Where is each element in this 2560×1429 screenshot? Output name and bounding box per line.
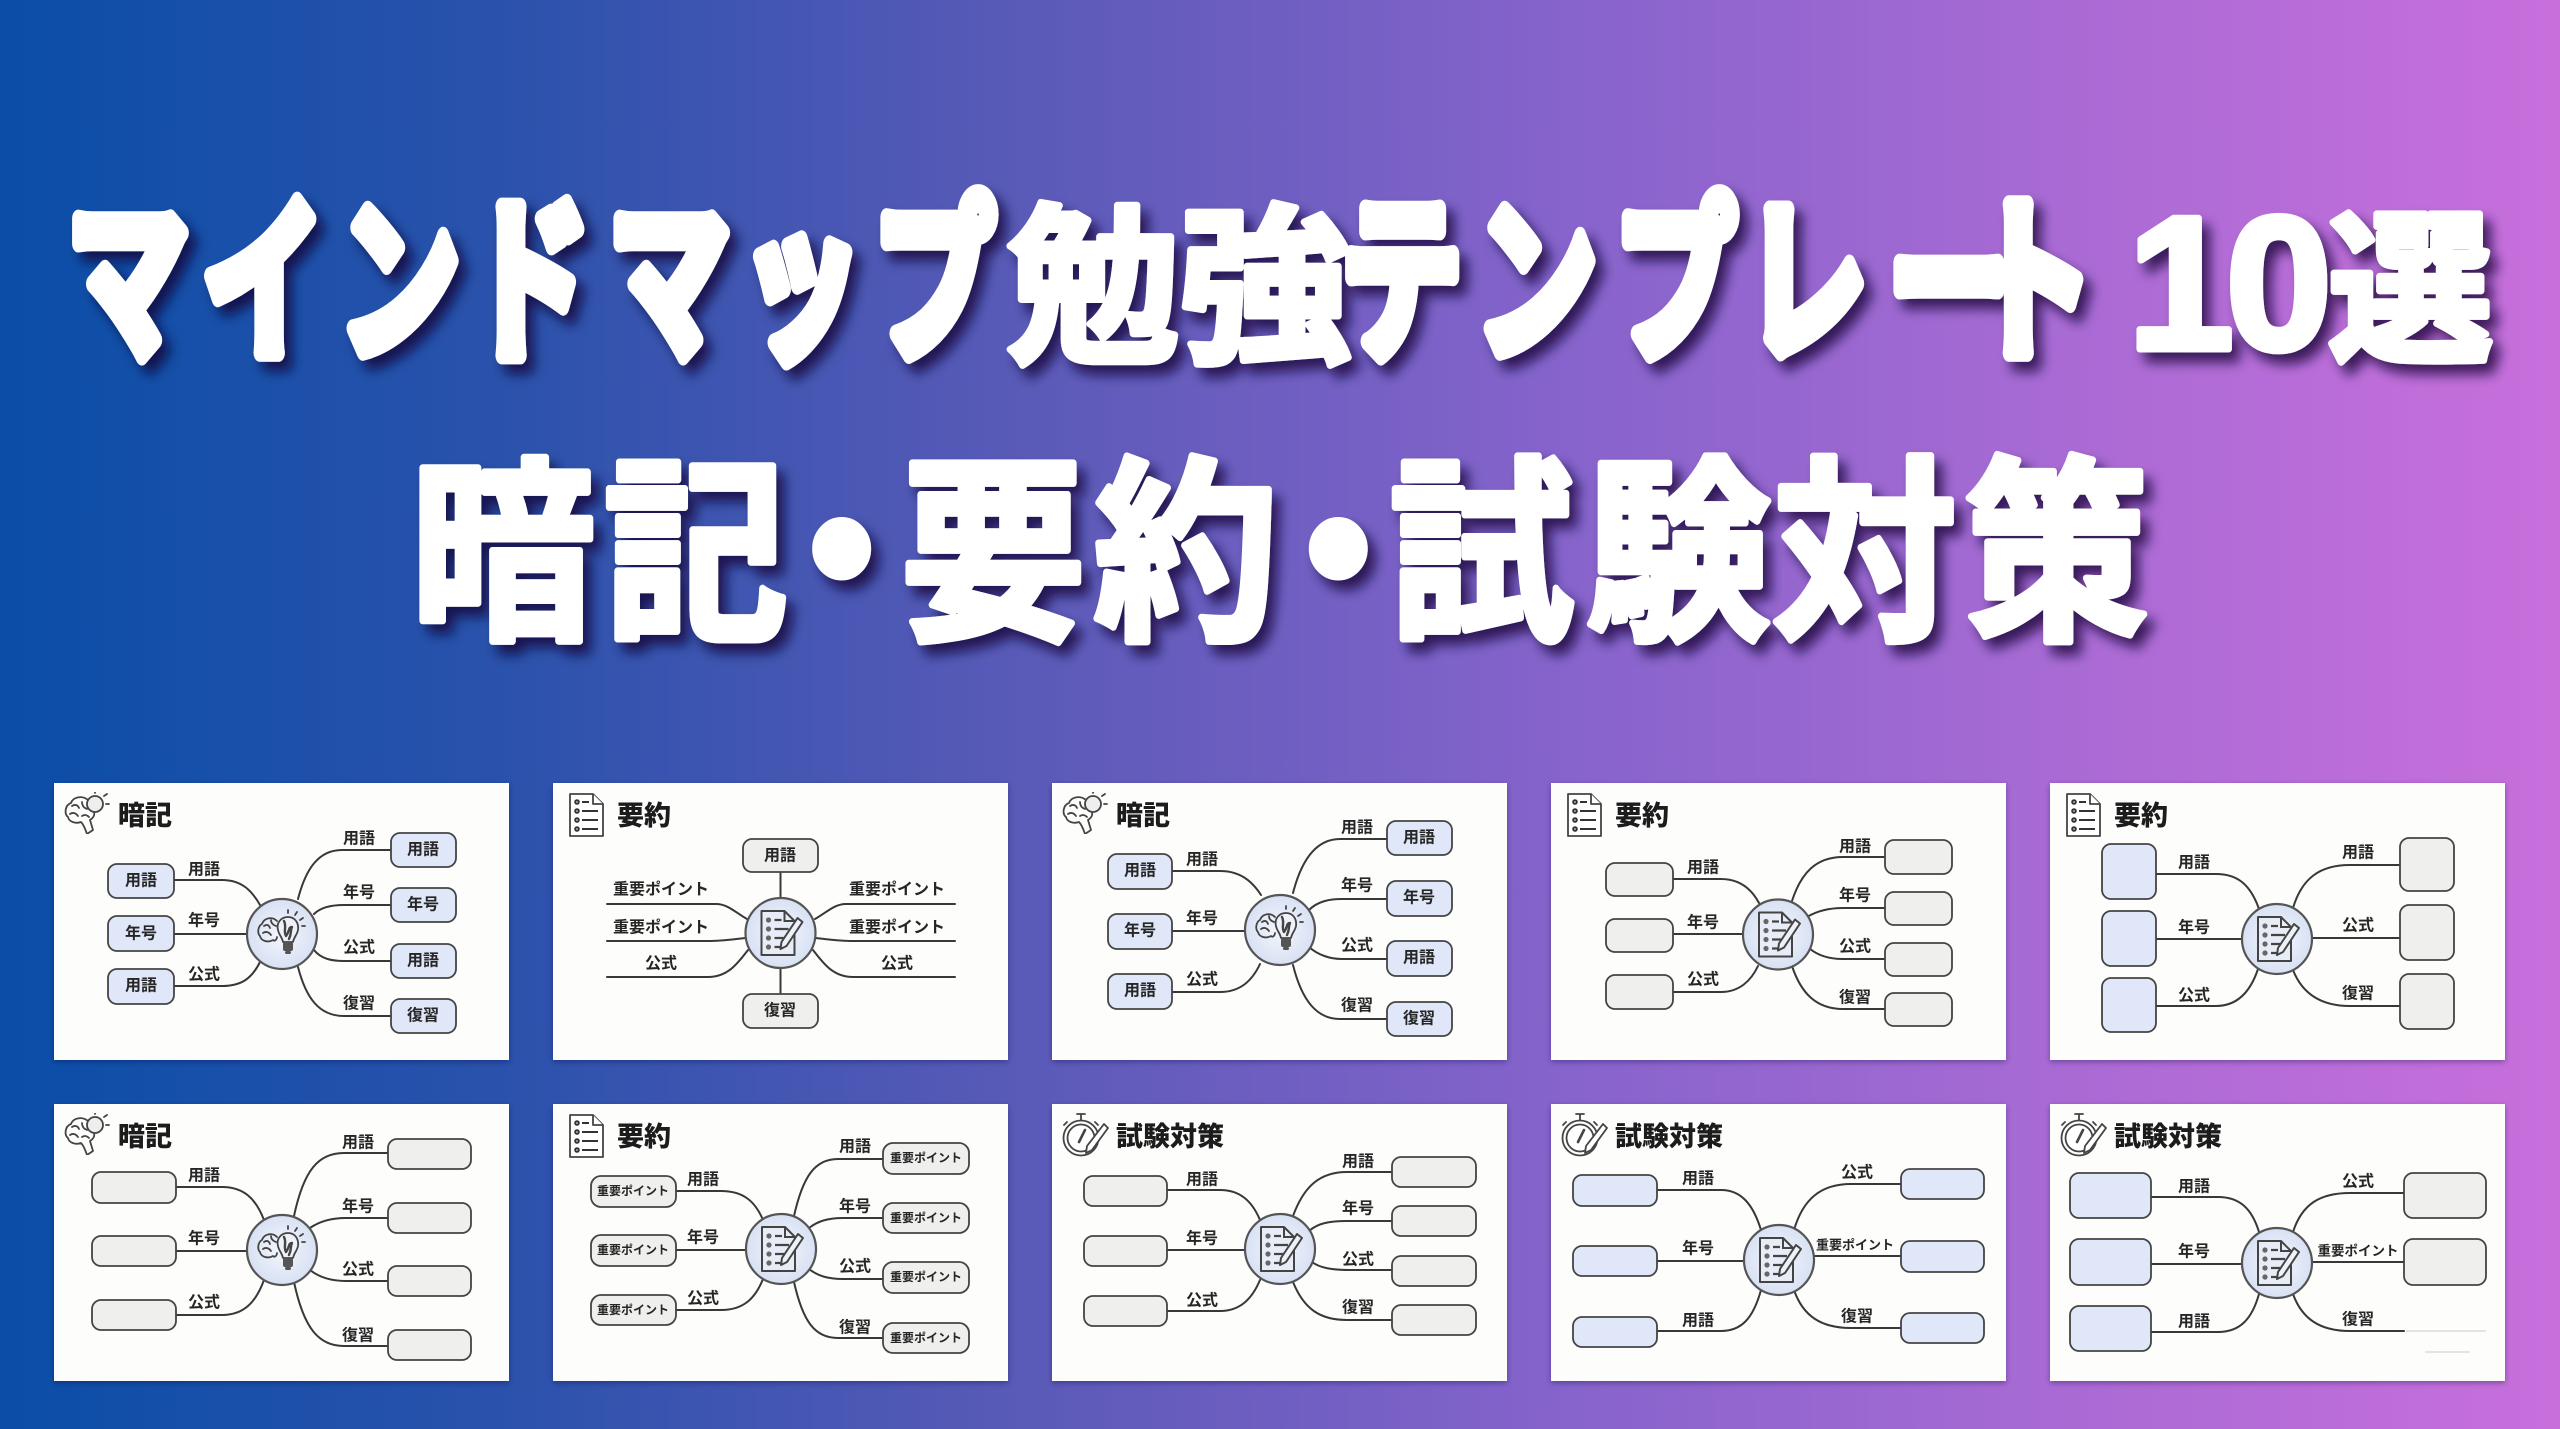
branches left: 用語 xyxy=(1186,850,1218,868)
icon: brain and bulb xyxy=(66,791,109,834)
template card 9: 試験対策 xyxy=(1551,1104,2006,1381)
center node xyxy=(2242,1228,2312,1298)
branches: 用語 xyxy=(764,846,796,864)
branches right: 復習 xyxy=(407,1006,439,1024)
branches right xyxy=(1293,818,1452,1036)
branches right: 用語 xyxy=(1342,1152,1374,1170)
branches left: 用語 xyxy=(1124,982,1156,1000)
branches: 重要ポイント xyxy=(613,880,709,898)
branches left xyxy=(2102,844,2259,1032)
branches left: 年号 xyxy=(1186,908,1218,928)
branches right: 用語 xyxy=(407,952,439,970)
branches right: 用語 xyxy=(2342,844,2374,862)
heading: 暗記 xyxy=(118,1122,172,1152)
branches: 公式 xyxy=(645,954,677,972)
card background xyxy=(553,1104,1008,1381)
branches right xyxy=(298,830,456,1033)
branches right: 復習 xyxy=(2342,1310,2374,1328)
center node xyxy=(2242,904,2312,974)
heading: 試験対策 xyxy=(1615,1121,1723,1152)
heading: 試験対策 xyxy=(2114,1121,2222,1152)
center node xyxy=(247,1215,317,1285)
template card 2: 要約 xyxy=(553,783,1008,1060)
center node xyxy=(1245,1214,1315,1284)
branches left: 年号 xyxy=(188,910,220,930)
branches left: 公式 xyxy=(687,1290,719,1308)
title line 2: 要約 xyxy=(901,445,1278,666)
branches right: 重要ポイント xyxy=(890,1330,962,1345)
branches left xyxy=(1084,1170,1260,1326)
branches left: 用語 xyxy=(1124,862,1156,880)
branches right: 重要ポイント xyxy=(890,1269,962,1284)
branches right: 年号 xyxy=(343,882,375,902)
branches right: 年号 xyxy=(1342,1198,1374,1218)
branches right: 公式 xyxy=(1341,936,1373,954)
branches right: 復習 xyxy=(1342,1298,1374,1316)
branches right: 公式 xyxy=(1839,938,1871,956)
card background xyxy=(1551,1104,2006,1381)
icon: document xyxy=(570,1115,603,1157)
branches right: 公式 xyxy=(2342,1172,2374,1190)
branches left: 重要ポイント xyxy=(597,1242,669,1257)
branches left: 年号 xyxy=(1186,1228,1218,1248)
branches right: 年号 xyxy=(1839,886,1871,904)
title line 1: テンプレート xyxy=(1341,185,2093,384)
branches left: 用語 xyxy=(1682,1170,1714,1188)
title line 2: ・ xyxy=(1246,445,1430,666)
branches right: 重要ポイント xyxy=(890,1150,962,1165)
heading: 要約 xyxy=(617,801,671,831)
branches left: 用語 xyxy=(125,872,157,890)
branches right: 年号 xyxy=(407,894,439,914)
template card 1: 暗記 xyxy=(54,783,509,1060)
icon: brain and bulb xyxy=(1064,791,1107,834)
branches left: 用語 xyxy=(2178,854,2210,872)
branches right xyxy=(2293,838,2454,1029)
branches right: 用語 xyxy=(342,1134,374,1152)
branches right: 復習 xyxy=(2342,984,2374,1002)
branches right: 年号 xyxy=(1403,888,1435,906)
branches right: 用語 xyxy=(407,840,439,858)
branches right: 公式 xyxy=(1841,1164,1873,1182)
branches right xyxy=(1794,1164,1984,1343)
title line 2: 試験対策 xyxy=(1389,445,2148,666)
card background xyxy=(2050,1104,2505,1381)
branches right: 公式 xyxy=(1342,1250,1374,1268)
branches right: 重要ポイント xyxy=(2318,1244,2398,1258)
icon: document xyxy=(2067,794,2100,836)
branches right: 復習 xyxy=(839,1318,871,1336)
branches left: 公式 xyxy=(188,966,220,984)
branches left xyxy=(1108,850,1261,1009)
branches right xyxy=(1792,838,1952,1026)
branches left xyxy=(1573,1170,1761,1347)
branches left xyxy=(108,860,260,1004)
icon: document xyxy=(570,794,603,836)
title line 2: ・ xyxy=(750,445,934,666)
branches right: 復習 xyxy=(1341,996,1373,1014)
card background xyxy=(1052,1104,1507,1381)
card background xyxy=(553,783,1008,1060)
title line 1: マインドマップ xyxy=(67,185,995,384)
branches left: 公式 xyxy=(2178,986,2210,1004)
branches left: 用語 xyxy=(1682,1312,1714,1330)
template card 6: 暗記 xyxy=(54,1104,509,1381)
branches right xyxy=(294,1134,471,1360)
card background xyxy=(54,783,509,1060)
template card 3: 暗記 xyxy=(1052,783,1507,1060)
branches left: 用語 xyxy=(1186,1170,1218,1188)
branches left: 公式 xyxy=(1687,970,1719,988)
branches left xyxy=(92,1166,264,1330)
branches left: 用語 xyxy=(687,1170,719,1188)
branches: 公式 xyxy=(881,954,913,972)
icon: stopwatch xyxy=(2062,1114,2106,1156)
branches right: 復習 xyxy=(342,1326,374,1344)
branches left: 年号 xyxy=(2178,1242,2210,1260)
branches right: 復習 xyxy=(343,994,375,1012)
branches left: 重要ポイント xyxy=(597,1302,669,1317)
branches right: 重要ポイント xyxy=(1816,1238,1894,1252)
branches left: 年号 xyxy=(1124,920,1156,940)
center node xyxy=(1743,900,1813,970)
branches right: 年号 xyxy=(839,1196,871,1216)
branches right xyxy=(1293,1152,1476,1335)
template card 5: 要約 xyxy=(2050,783,2505,1060)
template card 10: 試験対策 xyxy=(2050,1104,2505,1381)
branches left: 年号 xyxy=(125,924,157,942)
icon: stopwatch xyxy=(1064,1114,1108,1156)
branches: 重要ポイント xyxy=(849,918,945,936)
heading: 暗記 xyxy=(118,801,172,831)
card background xyxy=(1551,783,2006,1060)
branches right: 用語 xyxy=(1403,948,1435,966)
title line 2: 暗記 xyxy=(411,445,788,666)
branches left xyxy=(591,1170,763,1325)
branches right: 用語 xyxy=(1403,828,1435,846)
heading: 要約 xyxy=(1615,801,1669,831)
branches right: 用語 xyxy=(343,830,375,848)
title line 1: 選 xyxy=(2328,200,2493,384)
branches left: 年号 xyxy=(687,1228,719,1246)
branches right: 公式 xyxy=(342,1260,374,1278)
branches left: 年号 xyxy=(1682,1238,1714,1258)
branches right: 公式 xyxy=(343,938,375,956)
branches left: 公式 xyxy=(1186,1292,1218,1310)
icon: brain and bulb xyxy=(66,1112,109,1155)
branches left: 用語 xyxy=(2178,1178,2210,1196)
heading: 要約 xyxy=(2114,801,2168,831)
center node xyxy=(1245,895,1315,965)
title line 2 xyxy=(411,445,2148,666)
branches xyxy=(607,839,955,1028)
branches left xyxy=(1606,858,1759,1009)
branches left: 年号 xyxy=(1687,912,1719,932)
branches right: 復習 xyxy=(1403,1008,1435,1028)
branches left: 用語 xyxy=(1687,858,1719,876)
title line 1: 10 xyxy=(2128,178,2332,390)
branches left: 用語 xyxy=(188,860,220,878)
heading: 要約 xyxy=(617,1122,671,1152)
template card 8: 試験対策 xyxy=(1052,1104,1507,1381)
branches right: 公式 xyxy=(839,1258,871,1276)
branches right: 用語 xyxy=(1341,818,1373,836)
branches right: 重要ポイント xyxy=(890,1210,962,1225)
branches left xyxy=(2070,1173,2259,1351)
branches left: 年号 xyxy=(188,1228,220,1248)
branches left: 用語 xyxy=(2178,1312,2210,1330)
branches left: 公式 xyxy=(1186,970,1218,988)
center node xyxy=(746,898,816,968)
branches right xyxy=(794,1138,969,1353)
branches: 復習 xyxy=(764,1000,796,1020)
branches right: 復習 xyxy=(1839,988,1871,1006)
card background xyxy=(54,1104,509,1381)
branches left: 重要ポイント xyxy=(597,1183,669,1198)
card background xyxy=(2050,783,2505,1060)
branches left: 用語 xyxy=(188,1166,220,1184)
icon: stopwatch xyxy=(1562,1114,1607,1156)
branches: 重要ポイント xyxy=(613,918,709,936)
branches right: 復習 xyxy=(1841,1306,1873,1326)
heading: 暗記 xyxy=(1116,801,1170,831)
title line 1: 勉強 xyxy=(1007,194,1351,386)
branches right: 公式 xyxy=(2342,916,2374,934)
icon: document xyxy=(1568,794,1601,836)
card background xyxy=(1052,783,1507,1060)
center node xyxy=(1744,1225,1814,1295)
template card 4: 要約 xyxy=(1551,783,2006,1060)
branches right: 年号 xyxy=(1341,876,1373,894)
heading: 試験対策 xyxy=(1116,1121,1224,1152)
center node xyxy=(247,899,317,969)
branches: 重要ポイント xyxy=(849,880,945,898)
branches right: 年号 xyxy=(342,1196,374,1216)
branches left: 公式 xyxy=(188,1294,220,1312)
branches right xyxy=(2293,1172,2486,1352)
title line 1 xyxy=(67,178,2493,390)
branches left: 用語 xyxy=(125,976,157,994)
branches left: 年号 xyxy=(2178,918,2210,936)
template card 7: 要約 xyxy=(553,1104,1008,1381)
branches right: 用語 xyxy=(839,1138,871,1156)
branches right: 用語 xyxy=(1839,838,1871,856)
center node xyxy=(746,1214,816,1284)
